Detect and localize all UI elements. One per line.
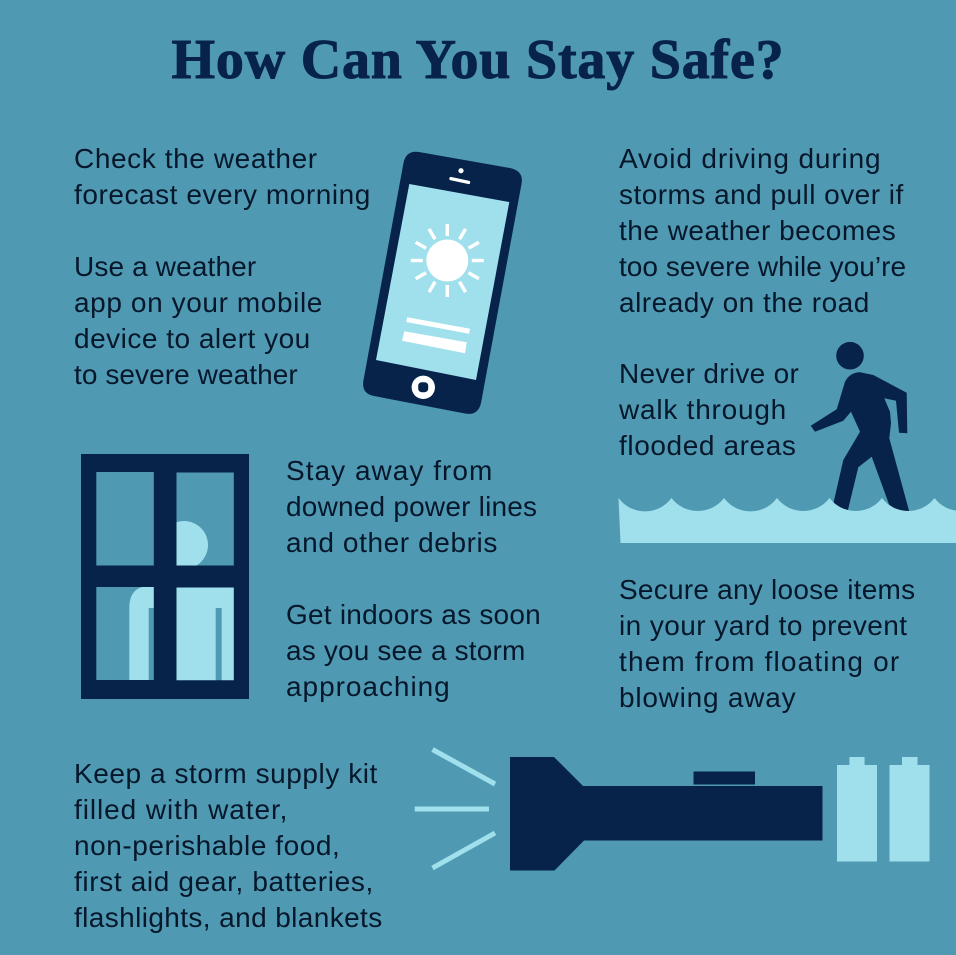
text: weather app: Use a weather xyxy=(74,251,256,282)
text: avoid driving: the weather becomes xyxy=(619,215,896,246)
text: supply kit: non-perishable food, xyxy=(74,830,340,861)
text: avoid driving: already on the road xyxy=(619,287,870,318)
text: secure items: Secure any loose items xyxy=(619,574,915,605)
text: avoid driving: Avoid driving during xyxy=(619,143,881,174)
text: power lines: Stay away from xyxy=(286,455,493,486)
text: secure items: them from floating or xyxy=(619,646,900,677)
text: weather app: app on your mobile xyxy=(74,287,323,318)
text: flooded areas: walk through xyxy=(619,394,787,425)
icon: smartphone with sun xyxy=(363,152,522,414)
text: avoid driving xyxy=(619,143,906,318)
text: weather app xyxy=(74,251,323,390)
text: flooded areas: Never drive or xyxy=(619,358,799,389)
text: get indoors: approaching xyxy=(286,671,451,702)
text: secure items: blowing away xyxy=(619,682,796,713)
text: secure items xyxy=(619,574,915,713)
text: get indoors: Get indoors as soon xyxy=(286,599,541,630)
text: flooded areas: flooded areas xyxy=(619,430,796,461)
text: get indoors xyxy=(286,599,541,702)
text: check forecast: forecast every morning xyxy=(74,179,371,210)
text: supply kit: flashlights, and blankets xyxy=(74,902,383,933)
icon: flashlight beams xyxy=(415,750,495,868)
text: weather app: to severe weather xyxy=(74,359,298,390)
text: check forecast xyxy=(74,143,371,210)
text: power lines: downed power lines xyxy=(286,491,537,522)
text: supply kit: Keep a storm supply kit xyxy=(74,758,378,789)
text: weather app: device to alert you xyxy=(74,323,311,354)
text: get indoors: as you see a storm xyxy=(286,635,525,666)
icon: window with person xyxy=(81,454,249,699)
icon: water waves xyxy=(618,498,956,543)
text: supply kit xyxy=(74,758,383,933)
text: supply kit: first aid gear, batteries, xyxy=(74,866,374,897)
text: power lines xyxy=(286,455,537,558)
text: avoid driving: too severe while you’re xyxy=(619,251,906,282)
text: power lines: and other debris xyxy=(286,527,498,558)
icon: batteries xyxy=(837,757,930,862)
icon: person walking in water xyxy=(811,342,911,518)
text: secure items: in your yard to prevent xyxy=(619,610,907,641)
text: avoid driving: storms and pull over if xyxy=(619,179,904,210)
icon: flashlight xyxy=(510,757,822,870)
text: supply kit: filled with water, xyxy=(74,794,288,825)
text: flooded areas xyxy=(619,358,799,461)
text: check forecast: Check the weather xyxy=(74,143,318,174)
title: How Can You Stay Safe? xyxy=(172,29,784,91)
